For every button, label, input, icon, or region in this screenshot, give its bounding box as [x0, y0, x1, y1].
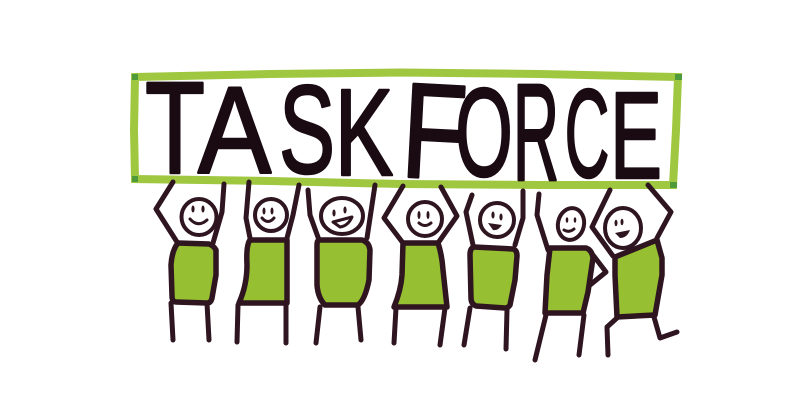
title: TASKFORCE: T [145, 54, 205, 201]
title: TASKFORCE: A [198, 61, 271, 199]
title: TASKFORCE: E [610, 67, 662, 204]
figure 6 [535, 194, 606, 360]
title: TASKFORCE: K [335, 63, 393, 201]
title: TASKFORCE: S [279, 60, 335, 200]
figure 7 [592, 185, 677, 355]
title: TASKFORCE: F [398, 55, 470, 209]
figure 4 [384, 186, 457, 345]
title: TASKFORCE: O [455, 63, 513, 203]
title: TASKFORCE: C [565, 64, 609, 204]
figure 3 [308, 185, 375, 343]
figure 1 [156, 182, 224, 340]
figure 2 [237, 182, 299, 343]
sign frame [132, 72, 682, 188]
figure 5 [464, 191, 523, 349]
title: TASKFORCE [145, 54, 662, 210]
title: TASKFORCE: R [513, 56, 559, 210]
